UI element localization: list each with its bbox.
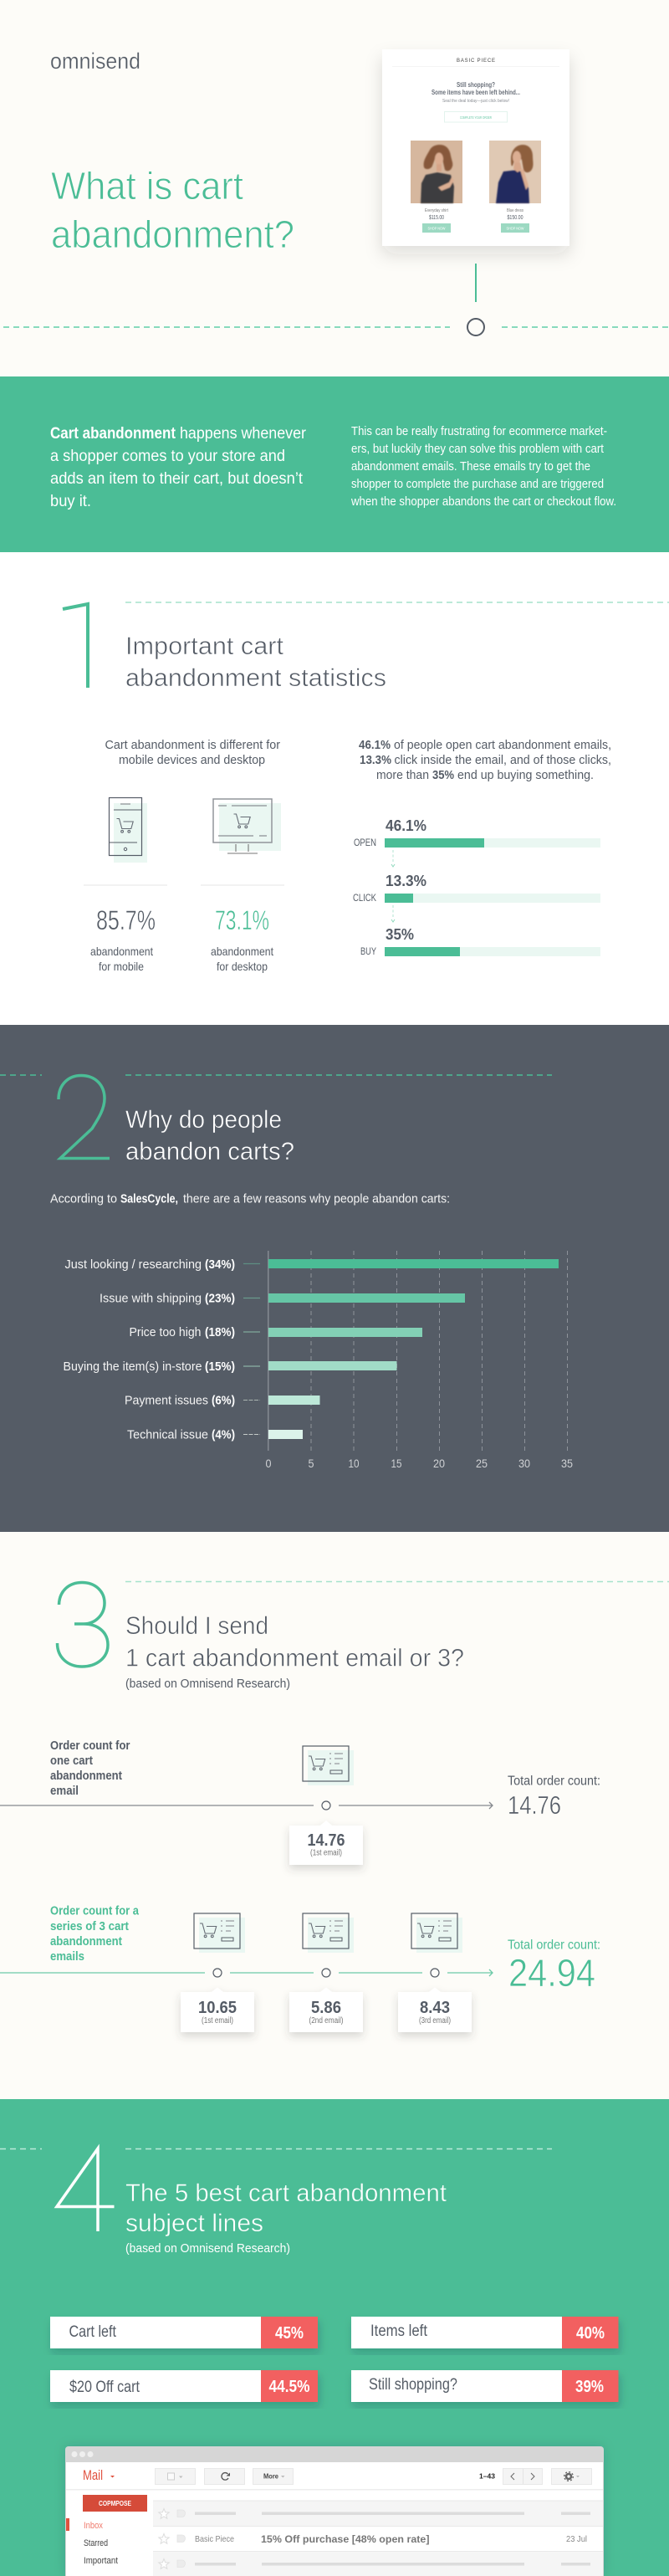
definition text left: adds an item to their cart, but doesn’t: [50, 470, 304, 488]
text: email funnel intro: of people open cart abandonment emails,: [394, 739, 611, 752]
row label: emails: [50, 1950, 84, 1964]
stat: mobile: 85.7%: [96, 905, 156, 935]
stat: mobile: abandonment: [90, 945, 153, 958]
heading: subject lines: [125, 2210, 263, 2237]
subject line: 20 off cart: $20 Off cart: [69, 2379, 140, 2396]
mail menu: Mail: [83, 2467, 103, 2483]
intro text: According to: [50, 1193, 117, 1206]
text: email funnel intro: 13.3%: [360, 754, 391, 767]
stat: mobile: for mobile: [99, 960, 144, 973]
subject line: items left: [351, 2317, 619, 2348]
value card: 14.76: [289, 1821, 363, 1865]
compose button: [83, 2495, 147, 2512]
value card: 8.43: [398, 1988, 472, 2032]
row label: [50, 1739, 130, 1798]
email mockup card: Still shopping?: [457, 81, 495, 89]
email mockup card: $115.00: [429, 215, 444, 221]
heading: [125, 632, 386, 692]
product photo: woman in dark shirt: [411, 141, 462, 203]
bars: [268, 1259, 559, 1439]
bar: buy: 35%: [386, 926, 414, 943]
panel: hero: [0, 0, 669, 376]
value card: 10.65: [181, 1988, 254, 2032]
subject line: items left: Items left: [370, 2322, 428, 2340]
bar: open: 46.1%: [386, 817, 426, 834]
panel: definition: [0, 376, 669, 552]
value card: 10.65: 10.65: [198, 1999, 237, 2017]
title: [51, 164, 294, 256]
email mockup card: BASIC PIECE: [457, 59, 495, 64]
email mockup card: Blue dress: [507, 208, 523, 213]
timeline with arrow: [0, 1802, 493, 1809]
heading: abandonment statistics: [125, 664, 386, 692]
bar: buy: [360, 926, 600, 957]
icon: desktop with cart: [213, 799, 281, 853]
bar chart: email funnel: [353, 817, 600, 957]
value card: 8.43: 8.43: [420, 1999, 450, 2017]
definition text left: [50, 425, 307, 510]
definition text left: buy it.: [50, 493, 91, 510]
heading: The 5 best cart abandonment: [125, 2179, 447, 2207]
panel: section 3 one or three emails: [0, 1532, 669, 2099]
definition text right: shopper to complete the purchase and are triggered: [351, 478, 604, 491]
logo: omnisend: omnisend: [50, 49, 140, 74]
definition text right: abandonment emails. These emails try to get the: [351, 460, 590, 474]
email rows: 15% Off purchase [48% open rate]: [261, 2533, 430, 2545]
mailbox list: Inbox: [84, 2521, 103, 2531]
timeline circle: [467, 319, 484, 335]
value card: 10.65: (1st email): [202, 2016, 233, 2025]
axis labels: 0: [266, 1457, 272, 1470]
icon: phone with cart: [109, 798, 147, 863]
axis labels: 5: [308, 1457, 314, 1470]
mailbox list: Important: [84, 2556, 118, 2566]
category labels: (6%): [212, 1394, 235, 1407]
window dots: [72, 2451, 94, 2457]
category labels: Price too high: [129, 1326, 201, 1339]
mailbox list: [66, 2518, 118, 2566]
axis labels: 20: [433, 1457, 445, 1470]
section number 2: [59, 1076, 110, 1158]
category labels: Technical issue: [127, 1429, 208, 1442]
inbox mockup: [65, 2446, 604, 2576]
panel: section 2 reasons: [0, 1025, 669, 1532]
intro text: [50, 1193, 450, 1206]
bar: open: [354, 817, 600, 848]
heading: abandon carts?: [125, 1138, 294, 1165]
subject line: cart left: [50, 2317, 318, 2348]
text: email funnel intro: 35%: [432, 769, 454, 782]
axis labels: 30: [518, 1457, 530, 1470]
stat: desktop: for desktop: [217, 960, 268, 973]
category labels: (34%): [205, 1258, 235, 1272]
bar: click: CLICK: [353, 892, 376, 904]
heading: [125, 1612, 464, 1672]
subject line: items left: 40%: [576, 2324, 605, 2343]
row label: Order count for a: [50, 1904, 140, 1918]
definition text right: ers, but luckily they can solve this problem with cart: [351, 443, 604, 456]
category labels: Payment issues: [125, 1394, 208, 1407]
email mockup card: SHOP NOW: [428, 226, 446, 231]
email rows: Basic Piece: [195, 2534, 234, 2544]
subject line: still shopping: Still shopping?: [369, 2376, 457, 2394]
heading: [125, 2179, 447, 2237]
row label: abandonment: [50, 1769, 122, 1783]
total: three emails: Total order count:: [508, 1938, 600, 1953]
text: mobile and desktop intro: mobile devices and desktop: [119, 754, 265, 767]
icon: email 3: [411, 1913, 462, 1953]
category labels: (18%): [205, 1326, 235, 1339]
category labels: (15%): [205, 1360, 235, 1374]
value card: 5.86: [289, 1988, 363, 2032]
row: one email: [0, 1739, 600, 1865]
row: three emails: [0, 1904, 600, 2032]
total: three emails: 24.94: [508, 1951, 595, 1995]
row label: series of 3 cart: [50, 1920, 129, 1933]
value card: 14.76: 14.76: [308, 1831, 345, 1850]
compose button: COPMPOSE: [99, 2499, 131, 2507]
bar: open: OPEN: [354, 837, 376, 848]
axis labels: 35: [561, 1457, 573, 1470]
definition text left: Cart abandonment: [50, 425, 176, 443]
category labels: Buying the item(s) in-store: [64, 1360, 202, 1374]
subject line: 20 off cart: 44.5%: [269, 2378, 310, 2396]
email mockup card: Some items have been left behind...: [432, 89, 520, 96]
heading: Important cart: [125, 632, 284, 660]
row label: [50, 1904, 140, 1964]
email mockup card: Seal the deal today—just click below!: [442, 99, 509, 104]
toolbar buttons: [156, 2468, 293, 2485]
icon: email 1: [194, 1913, 245, 1953]
total: one email: Total order count:: [508, 1774, 600, 1789]
value card: 5.86: (2nd email): [309, 2016, 343, 2025]
definition text left: happens whenever: [180, 425, 307, 443]
row label: one cart: [50, 1754, 93, 1768]
email rows: [153, 2501, 603, 2576]
value card: 14.76: (1st email): [310, 1849, 342, 1857]
toolbar buttons: More: [263, 2473, 279, 2480]
subject line: 20 off cart: [50, 2370, 318, 2402]
intro text: SalesCycle,: [120, 1193, 178, 1206]
heading: Should I send: [125, 1612, 268, 1640]
heading: [125, 1106, 294, 1165]
row label: abandonment: [50, 1935, 122, 1949]
total: one email: 14.76: [508, 1790, 561, 1820]
axis labels: [266, 1457, 573, 1470]
source note: (based on Omnisend Research): [125, 1677, 290, 1691]
icon: email 2: [303, 1913, 354, 1953]
text: email funnel intro: end up buying something.: [457, 769, 594, 782]
category labels: (4%): [212, 1429, 235, 1442]
email rows: 23 Jul: [566, 2534, 587, 2544]
stat: desktop: 73.1%: [215, 905, 269, 935]
email mockup card: SHOP NOW: [507, 226, 524, 231]
subject line: still shopping: 39%: [575, 2378, 604, 2396]
heading: 1 cart abandonment email or 3?: [125, 1645, 464, 1672]
pager and settings: 1–43: [479, 2471, 495, 2480]
row label: email: [50, 1785, 79, 1798]
title: abandonment?: [51, 213, 294, 256]
axis labels: 25: [476, 1457, 488, 1470]
text: email funnel intro: more than: [376, 769, 429, 782]
definition text right: [350, 425, 616, 509]
bar: buy: BUY: [360, 945, 376, 957]
stat: desktop: abandonment: [211, 945, 273, 958]
definition text right: This can be really frustrating for ecommerce market-: [351, 425, 607, 438]
text: mobile and desktop intro: Cart abandonment is different for: [105, 739, 280, 752]
value card: 5.86: 5.86: [311, 1999, 341, 2017]
category labels: Just looking / researching: [65, 1258, 202, 1272]
stat: mobile: [90, 905, 156, 973]
axis labels: 10: [348, 1457, 360, 1470]
subject line: cart left: Cart left: [69, 2323, 117, 2341]
row label: Order count for: [50, 1739, 130, 1753]
category labels: [64, 1258, 235, 1442]
email mockup card: [382, 49, 569, 246]
panel: section 4 subject lines: [0, 2099, 669, 2576]
intro text: there are a few reasons why people abandon carts:: [183, 1193, 450, 1206]
heading: Why do people: [125, 1106, 282, 1134]
value card: 8.43: (3rd email): [419, 2016, 451, 2025]
text: email funnel intro: [359, 739, 611, 782]
total: one email: [508, 1774, 600, 1820]
source note: (based on Omnisend Research): [125, 2242, 290, 2256]
connector line: [475, 264, 477, 302]
subject line: cart left: 45%: [275, 2324, 304, 2343]
email mockup card: $150.00: [507, 215, 523, 221]
section number 3: [57, 1583, 108, 1667]
definition text left: a shopper comes to your store and: [50, 448, 285, 465]
product photo: woman in blue sweater: [489, 141, 541, 203]
text: mobile and desktop intro: [105, 739, 280, 767]
definition text right: when the shopper abandons the cart or checkout flow.: [350, 495, 616, 509]
title: What is cart: [51, 164, 243, 207]
subject line: still shopping: [351, 2370, 619, 2402]
icon: email with cart: [303, 1746, 354, 1785]
stat: desktop: [211, 905, 273, 973]
text: email funnel intro: 46.1%: [359, 739, 391, 752]
text: email funnel intro: click inside the email, and of those clicks,: [395, 754, 611, 767]
bar: click: [353, 873, 600, 904]
section number 1: [63, 604, 88, 688]
email mockup card: COMPLETE YOUR ORDER: [460, 115, 492, 120]
timeline with arrow: [0, 1969, 493, 1976]
bar chart: reasons: [64, 1251, 573, 1470]
axis labels: 15: [391, 1457, 402, 1470]
email mockup card: Everyday shirt: [425, 208, 448, 213]
category labels: Issue with shipping: [100, 1292, 202, 1305]
category labels: (23%): [205, 1292, 235, 1305]
panel: section 1 statistics: [0, 552, 669, 1025]
section number 4: [57, 2148, 114, 2231]
bar: click: 13.3%: [386, 873, 426, 889]
pager and settings: [479, 2468, 592, 2485]
mailbox list: Starred: [84, 2538, 108, 2548]
